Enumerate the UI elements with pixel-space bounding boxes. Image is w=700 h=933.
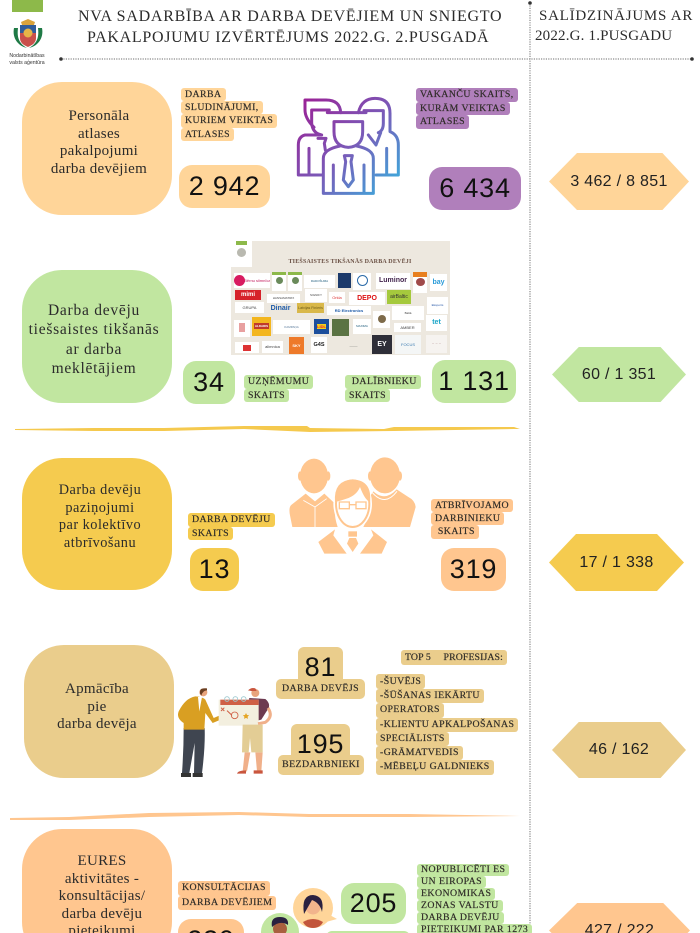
label: nopublicēti pieteikumi: NOPUBLICĒTI ES (421, 864, 505, 875)
panel: kolektīvā atbrīvošana: par kolektīvo (59, 517, 141, 533)
label: atbrīvojamo darbinieku skaits: DARBINIEKU (435, 513, 500, 524)
number: 2 942: 2 942 (189, 171, 260, 201)
image: logo collage: SIGNIFY (310, 293, 322, 297)
label: darba sludinājumi: DARBA (185, 89, 222, 100)
image: logo collage: Latvijas Finieris (298, 306, 323, 310)
label: darba devējs: DARBA DEVĒJS (282, 683, 359, 694)
panel: kolektīvā atbrīvošana: Darba devēju (59, 482, 141, 498)
image: logo collage: Eksports (432, 303, 443, 307)
number: 195 (291, 724, 350, 764)
image: logo collage: MAXIMA (356, 324, 368, 328)
image: logo collage: mimi (241, 292, 255, 298)
label: atbrīvojamo darbinieku skaits: SKAITS (438, 526, 475, 537)
number: 205: 205 (350, 888, 397, 918)
comparison hexagon: 427 / 222 (549, 903, 690, 933)
number: 13 (190, 548, 239, 591)
comparison column heading (535, 8, 693, 44)
image: logo collage: airBaltic (390, 294, 408, 300)
label: darba sludinājumi: KURIEM VEIKTAS (185, 115, 273, 126)
comparison column heading: SALĪDZINĀJUMS AR (539, 8, 693, 24)
panel: apmācība pie darba devēja (24, 645, 174, 778)
number: 1 131: 1 131 (438, 366, 510, 396)
label: atbrīvojamo darbinieku skaits (431, 499, 513, 539)
label: vakanču skaits (416, 88, 518, 129)
image: logo collage: ALDARIS (255, 324, 268, 328)
image: logo collage: KAMPAŅA (284, 325, 299, 329)
label: konsultācijas darba devējiem: KONSULTĀCIJAS (182, 882, 266, 893)
label: nopublicēti pieteikumi (417, 864, 532, 933)
list: top 5 profesijas: TOP 5 PROFESIJAS: (405, 652, 503, 663)
panel: kolektīvā atbrīvošana: atbrīvošanu (64, 535, 136, 551)
list: top 5 profesijas: -ŠUVĒJS (380, 676, 421, 687)
image: logo collage: Luminor (379, 277, 407, 284)
comparison hexagon: 46 / 162: 46 / 162 (589, 741, 649, 758)
label: bezdarbnieki: BEZDARBNIEKI (282, 759, 360, 770)
number: konsultācijas (178, 919, 244, 933)
image: logo collage: GRUPA (243, 305, 256, 310)
label: konsultācijas darba devējiem (178, 881, 276, 910)
image: logo collage: FOCUS (401, 342, 415, 347)
label: darba sludinājumi: SLUDINĀJUMI, (185, 102, 259, 113)
title (78, 8, 502, 46)
panel: apmācība pie darba devēja: Apmācība (65, 681, 129, 697)
image: logo collage: —— (350, 343, 358, 348)
divider brush yellow (15, 426, 520, 432)
comparison column heading: 2022.G. 1.PUSGADU (535, 28, 672, 44)
comparison hexagon: 60 / 1 351 (552, 347, 686, 402)
image: logo collage (231, 241, 450, 355)
label: darba sludinājumi (181, 88, 277, 141)
panel: eures aktivitātes: darba devēju (62, 906, 142, 922)
number: 6 434: 6 434 (439, 173, 511, 203)
label: vakanču skaits: VAKANČU SKAITS, (420, 89, 514, 100)
title: PAKALPOJUMU IZVĒRTĒJUMS 2022.G. 2.PUSGADĀ (87, 29, 489, 46)
image: logo collage: DEPO (357, 295, 377, 302)
panel: apmācība pie darba devēja: darba devēja (57, 716, 137, 732)
image: logo collage: tet (432, 319, 441, 326)
list: top 5 profesijas: -ŠŪŠANAS IEKĀRTU (380, 690, 480, 701)
divider brush orange (10, 812, 518, 820)
image: logo collage: Orkla (332, 295, 342, 300)
illustration: two people with calendar (178, 688, 272, 777)
image: logo collage: Dinair (271, 305, 290, 312)
panel: tiešsaistes tikšanās (22, 270, 172, 403)
image: logo collage: EY (377, 341, 387, 348)
number: 81 (298, 647, 343, 687)
panel: kolektīvā atbrīvošana (22, 458, 172, 590)
label: vakanču skaits: ATLASES (420, 116, 465, 127)
image: logo collage: HANSAMATRIX (273, 296, 294, 300)
label: darba sludinājumi: ATLASES (185, 129, 230, 140)
comparison hexagon: 46 / 162 (552, 722, 686, 778)
label: uzņēmumu skaits (244, 375, 313, 402)
number: 319 (441, 548, 506, 591)
label: uzņēmumu skaits: SKAITS (248, 390, 285, 400)
panel: apmācība pie darba devēja: pie (87, 699, 107, 715)
panel: tiešsaistes tikšanās: ar darba (66, 341, 122, 358)
icon: three business people (289, 457, 416, 554)
label: dalībnieku skaits: DALĪBNIEKU (352, 376, 417, 387)
panel: personāla atlases: pakalpojumi (60, 143, 138, 159)
label: nopublicēti pieteikumi: ZONAS VALSTU (421, 900, 499, 911)
number: 34 (183, 361, 235, 404)
label: vakanču skaits: KURĀM VEIKTAS (420, 103, 506, 114)
image: logo collage: G4S (313, 342, 324, 348)
number: 13: 13 (199, 554, 230, 584)
panel: kolektīvā atbrīvošana: paziņojumi (65, 500, 135, 516)
list: top 5 profesijas: SPECIĀLISTS (380, 733, 445, 744)
list: top 5 profesijas (376, 650, 518, 775)
number: 34: 34 (193, 367, 225, 397)
logo: green tab and crest: Nodarbinātības (9, 53, 45, 59)
label: dalībnieku skaits: SKAITS (349, 390, 386, 400)
panel: personāla atlases: atlases (78, 126, 120, 142)
panel: tiešsaistes tikšanās: Darba devēju (48, 302, 140, 319)
image: logo collage: ~ ~ ~ (432, 341, 441, 346)
comparison hexagon: 3 462 / 8 851 (549, 153, 689, 210)
image: logo collage: SKY (292, 343, 301, 348)
comparison hexagon: 3 462 / 8 851: 3 462 / 8 851 (570, 172, 668, 190)
comparison hexagon: 60 / 1 351: 60 / 1 351 (582, 366, 656, 382)
list: top 5 profesijas: -GRĀMATVEDIS (380, 747, 459, 758)
image: logo collage: RD Electronics (335, 308, 363, 313)
image: logo collage: RADOŠUMA (311, 279, 328, 283)
panel: eures aktivitātes: aktivitātes - (65, 871, 139, 887)
label: darba devēju skaits: SKAITS (192, 528, 229, 538)
number: 6 434 (429, 167, 521, 210)
label: nopublicēti pieteikumi: UN EIROPAS (421, 876, 482, 887)
comparison hexagon: 17 / 1 338: 17 / 1 338 (579, 554, 654, 570)
label: nopublicēti pieteikumi: EKONOMIKAS (421, 888, 491, 899)
panel: personāla atlases (22, 82, 172, 215)
label: atbrīvojamo darbinieku skaits: ATBRĪVOJAMO (435, 500, 509, 511)
number: 1 131 (432, 360, 516, 403)
label: darba devēju skaits: DARBA DEVĒJU (192, 514, 271, 525)
image: logo collage: LIDL (317, 324, 326, 329)
label: dalībnieku skaits (345, 375, 421, 402)
number: 2 942 (179, 165, 270, 208)
image: logo collage: Bērnu slimnīca (244, 278, 270, 283)
panel: personāla atlases: darba devējiem (51, 161, 147, 177)
number: 205 (341, 883, 406, 924)
image: logo collage: alimnica (265, 344, 280, 349)
image: logo collage: bay (432, 279, 445, 286)
label: darba devēju skaits (188, 513, 275, 540)
panel: eures aktivitātes: EURES (77, 853, 126, 869)
panel: tiešsaistes tikšanās: meklētājiem (52, 360, 136, 377)
logo: green tab and crest: valsts aģentūra (9, 60, 45, 66)
title: NVA SADARBĪBA AR DARBA DEVĒJIEM UN SNIEGTO (78, 8, 502, 25)
panel: eures aktivitātes (22, 829, 172, 933)
comparison hexagon: 17 / 1 338 (549, 534, 684, 591)
image: logo collage: Baltā (405, 311, 411, 315)
label: uzņēmumu skaits: UZŅĒMUMU (248, 376, 309, 387)
number: second green box (326, 931, 410, 933)
label: nopublicēti pieteikumi: DARBA DEVĒJU (421, 912, 500, 923)
panel: tiešsaistes tikšanās: tiešsaistes tikšanās (29, 321, 159, 338)
panel: eures aktivitātes: konsultācijas/ (59, 888, 145, 904)
list: top 5 profesijas: -KLIENTU APKALPOŠANAS (380, 719, 514, 730)
label: konsultācijas darba devējiem: DARBA DEVĒJIEM (182, 896, 272, 908)
icon: support agents (261, 888, 337, 933)
logo: green tab and crest (9, 0, 45, 66)
list: top 5 profesijas: OPERATORS (380, 704, 440, 715)
number: 319: 319 (450, 554, 497, 584)
panel: personāla atlases: Personāla (68, 108, 130, 124)
image: logo collage: TIEŠSAISTES TIKŠANĀS DARBA DEVĒJI (288, 259, 412, 265)
icon: three people (296, 96, 400, 195)
image: logo collage: AMBER (400, 325, 415, 330)
number: 81: 81 (305, 652, 336, 682)
number: 195: 195 (297, 728, 344, 758)
list: top 5 profesijas: -MĒBEĻU GALDNIEKS (380, 761, 490, 772)
